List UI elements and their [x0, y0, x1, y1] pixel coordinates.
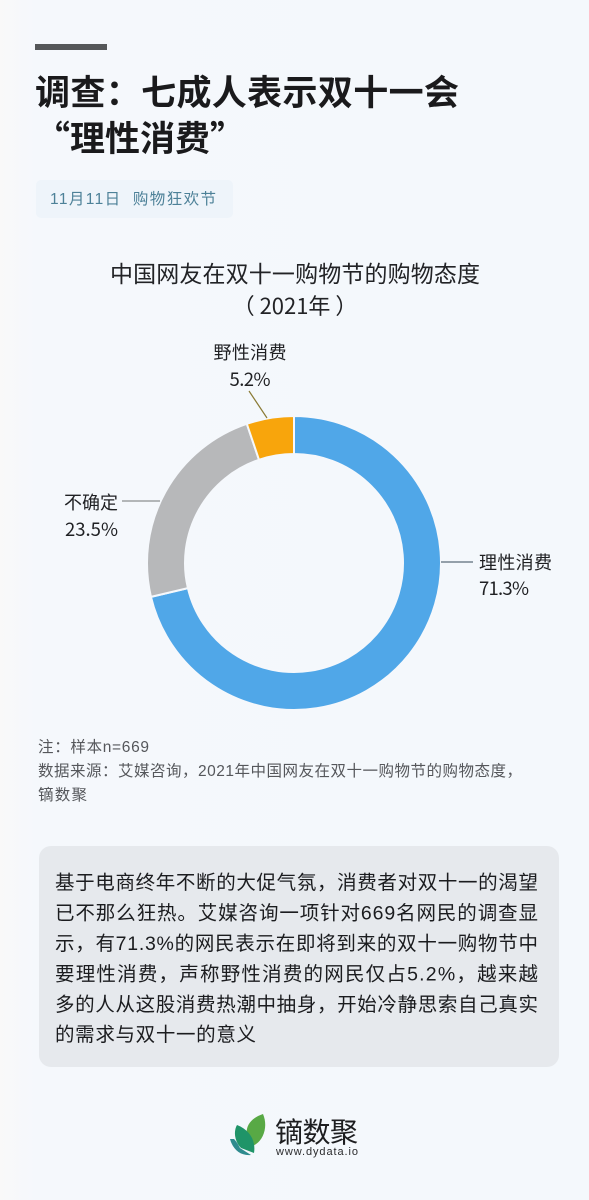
source note [38, 738, 522, 804]
chart title: 中国网友在双十一购物节的购物态度 [110, 261, 480, 287]
source note: 注：样本n=669 [38, 738, 149, 756]
title [35, 65, 459, 162]
logo url: www.dydata.io [275, 1146, 358, 1158]
summary text: 示，有71.3%的网民表示在即将到来的双十一购物节中 [55, 933, 538, 955]
summary text: 要理性消费，声称野性消费的网民仅占5.2%，越来越 [55, 964, 538, 986]
summary text: 基于电商终年不断的大促气氛，消费者对双十一的渴望 [55, 872, 538, 894]
segment: rational spending 71.3% [151, 416, 441, 710]
title: “理性消费” [35, 111, 245, 162]
summary text: 多的人从这股消费热潮中抽身，开始冷静思索自己真实 [55, 994, 538, 1016]
summary panel [39, 846, 559, 1067]
label: unsure: 不确定 [64, 489, 118, 515]
tag: date and event [36, 180, 233, 218]
label: rational spending: 71.3% [479, 575, 529, 601]
label: unsure: 23.5% [65, 516, 118, 542]
chart title: （ 2021年 ） [233, 289, 357, 321]
source note: 数据来源：艾媒咨询，2021年中国网友在双十一购物节的购物态度， [38, 762, 522, 780]
source note: 镝数聚 [38, 786, 87, 804]
label: impulsive spending [214, 339, 286, 418]
title: 调查：七成人表示双十一会 [35, 65, 459, 116]
header accent bar [35, 44, 107, 50]
label: rational spending: 理性消费 [479, 549, 552, 575]
label: impulsive spending: 野性消费 [214, 339, 286, 365]
chart title [110, 261, 480, 321]
icon: leaves [230, 1114, 265, 1155]
label: impulsive spending: 5.2% [230, 366, 270, 392]
label: unsure [64, 489, 160, 542]
segment: impulsive spending 5.2% [247, 416, 294, 460]
summary text: 的需求与双十一的意义 [55, 1024, 256, 1046]
logo [230, 1114, 358, 1158]
label: rational spending [441, 549, 552, 601]
logo wordmark: 镝数聚 [275, 1117, 358, 1148]
tag: date and event: 11月11日 购物狂欢节 [50, 190, 216, 208]
summary text [55, 872, 538, 1046]
segment: unsure 23.5% [147, 424, 259, 597]
summary text: 已不那么狂热。艾媒咨询一项针对669名网民的调查显 [55, 902, 538, 924]
donut chart [147, 416, 441, 710]
